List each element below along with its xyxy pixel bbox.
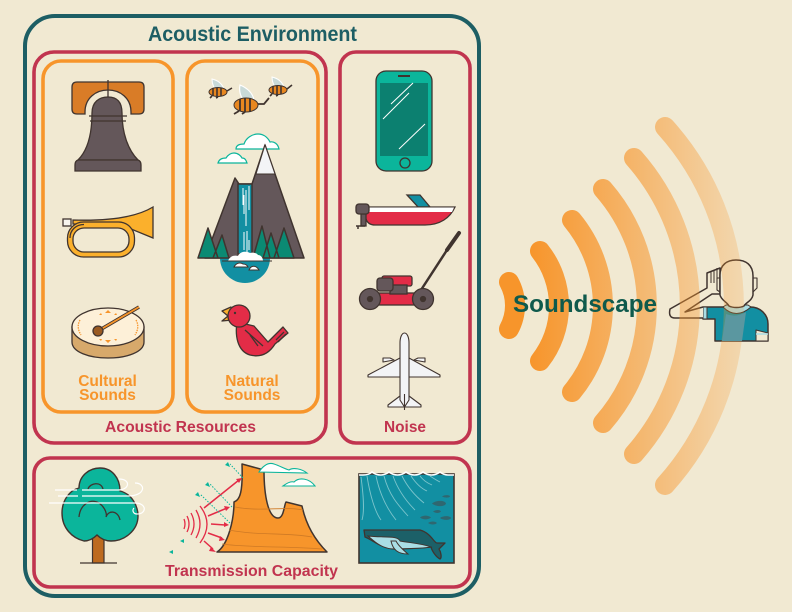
chart: sound wave arcs	[509, 127, 734, 485]
label: noise: Noise	[384, 419, 426, 436]
label: natural sounds: Natural	[225, 373, 279, 390]
icon: canyon cliff	[217, 463, 327, 552]
icon: airplane	[368, 333, 440, 410]
label: acoustic resources: Acoustic Resources	[105, 419, 256, 436]
panel: transmission capacity	[34, 458, 470, 587]
title: Acoustic Environment	[148, 23, 357, 46]
icon: drum	[72, 307, 144, 358]
panel: natural sounds	[187, 61, 318, 412]
label: natural sounds: Sounds	[224, 387, 280, 404]
panel: acoustic environment frame	[25, 16, 479, 596]
panel: acoustic resources	[34, 52, 326, 443]
icon: motorboat	[356, 195, 455, 229]
icon: sound waves and reflected arrows	[169, 462, 243, 554]
icon: listening person	[670, 260, 768, 341]
label: cultural sounds: Cultural	[78, 373, 137, 390]
icon: bees	[209, 77, 292, 114]
icon: whale under water	[359, 472, 454, 563]
icon: bird	[222, 305, 288, 356]
icon: clouds	[218, 134, 279, 163]
icon: smartphone	[376, 71, 432, 171]
panel: noise	[340, 52, 470, 443]
label: transmission capacity: Transmission Capacity	[165, 563, 338, 580]
icon: tree in wind	[49, 468, 144, 563]
label: soundscape: Soundscape	[513, 291, 657, 318]
icon: lawn mower	[360, 233, 459, 310]
icon: bugle	[63, 207, 153, 257]
icon: liberty bell	[72, 80, 144, 171]
panel: cultural sounds	[43, 61, 173, 412]
label: cultural sounds: Sounds	[79, 387, 136, 404]
icon: mountain with waterfall	[198, 145, 304, 283]
shirt highlight where the outer arc crosses the shirt	[722, 312, 746, 341]
